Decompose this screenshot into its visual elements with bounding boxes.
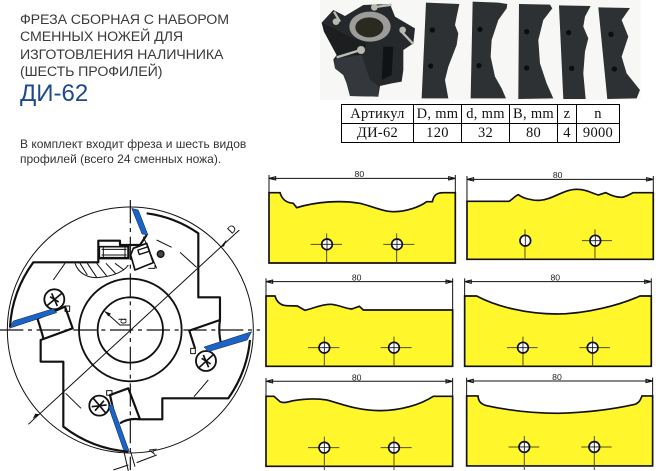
screws bbox=[44, 289, 216, 416]
hatched section bbox=[75, 263, 128, 278]
specification table: 32 bbox=[478, 125, 493, 141]
dimension D bbox=[28, 230, 239, 424]
letter labels bbox=[118, 222, 239, 456]
specification table: ДИ-62 bbox=[357, 125, 398, 141]
cutter technical drawing bbox=[0, 200, 260, 471]
specification table: Артикул bbox=[350, 106, 405, 122]
specification table: D, mm bbox=[417, 106, 458, 122]
photo: knife 4 bbox=[559, 5, 591, 99]
description: профилей (всего 24 сменных ножа). bbox=[20, 152, 221, 166]
photo: knife 2 bbox=[471, 2, 507, 98]
profile 1: 80 bbox=[355, 169, 364, 179]
centre lines bbox=[0, 328, 260, 332]
cutter body outline bbox=[10, 213, 250, 452]
knife profiles bbox=[266, 169, 653, 470]
profile 1 bbox=[269, 169, 455, 263]
specification table: 9000 bbox=[583, 125, 613, 141]
title: (ШЕСТЬ ПРОФИЛЕЙ) bbox=[20, 64, 162, 80]
title: ФРЕЗА СБОРНАЯ С НАБОРОМ bbox=[20, 12, 229, 28]
specification table: B, mm bbox=[513, 106, 554, 122]
profile 5 bbox=[266, 372, 453, 470]
specification table: z bbox=[564, 106, 570, 122]
profile 5: 80 bbox=[352, 372, 362, 382]
dimension d bbox=[104, 311, 130, 325]
profile 6: 80 bbox=[552, 372, 562, 382]
profile 3: 80 bbox=[352, 272, 362, 282]
description bbox=[20, 137, 246, 166]
title: ИЗГОТОВЛЕНИЯ НАЛИЧНИКА bbox=[20, 47, 223, 63]
letter labels: A bbox=[147, 446, 160, 456]
photo: knife 5 bbox=[598, 7, 640, 99]
specification table: 120 bbox=[426, 125, 449, 141]
outer circle D bbox=[7, 207, 253, 453]
hub rings bbox=[79, 279, 182, 381]
letter labels: D bbox=[225, 222, 239, 236]
specification table: n bbox=[594, 106, 602, 122]
specification table: 80 bbox=[526, 125, 541, 141]
description: В комплект входит фреза и шесть видов bbox=[20, 137, 246, 151]
photo: assembled cutter bbox=[322, 4, 415, 97]
dimension A bbox=[113, 452, 157, 471]
photo: knife 3 bbox=[518, 4, 553, 99]
profile 6 bbox=[467, 372, 653, 470]
blue knives bbox=[9, 208, 252, 452]
top clamp detail bbox=[99, 237, 164, 270]
product code: ДИ-62 bbox=[20, 80, 88, 107]
specification table: d, mm bbox=[466, 106, 505, 122]
arc marks bbox=[53, 240, 208, 408]
photo: cutter and knives bbox=[320, 0, 641, 100]
profile 3 bbox=[266, 272, 453, 366]
specification table: 4 bbox=[563, 125, 571, 141]
profile 2 bbox=[467, 170, 653, 259]
profile 4: 80 bbox=[550, 272, 560, 282]
letter labels: d bbox=[118, 318, 130, 324]
profile 2: 80 bbox=[553, 170, 563, 180]
photo: knife 1 bbox=[422, 3, 459, 98]
profile 4 bbox=[465, 272, 651, 366]
specification table bbox=[341, 104, 620, 143]
title bbox=[20, 12, 229, 80]
title: СМЕННЫХ НОЖЕЙ ДЛЯ bbox=[20, 29, 183, 45]
